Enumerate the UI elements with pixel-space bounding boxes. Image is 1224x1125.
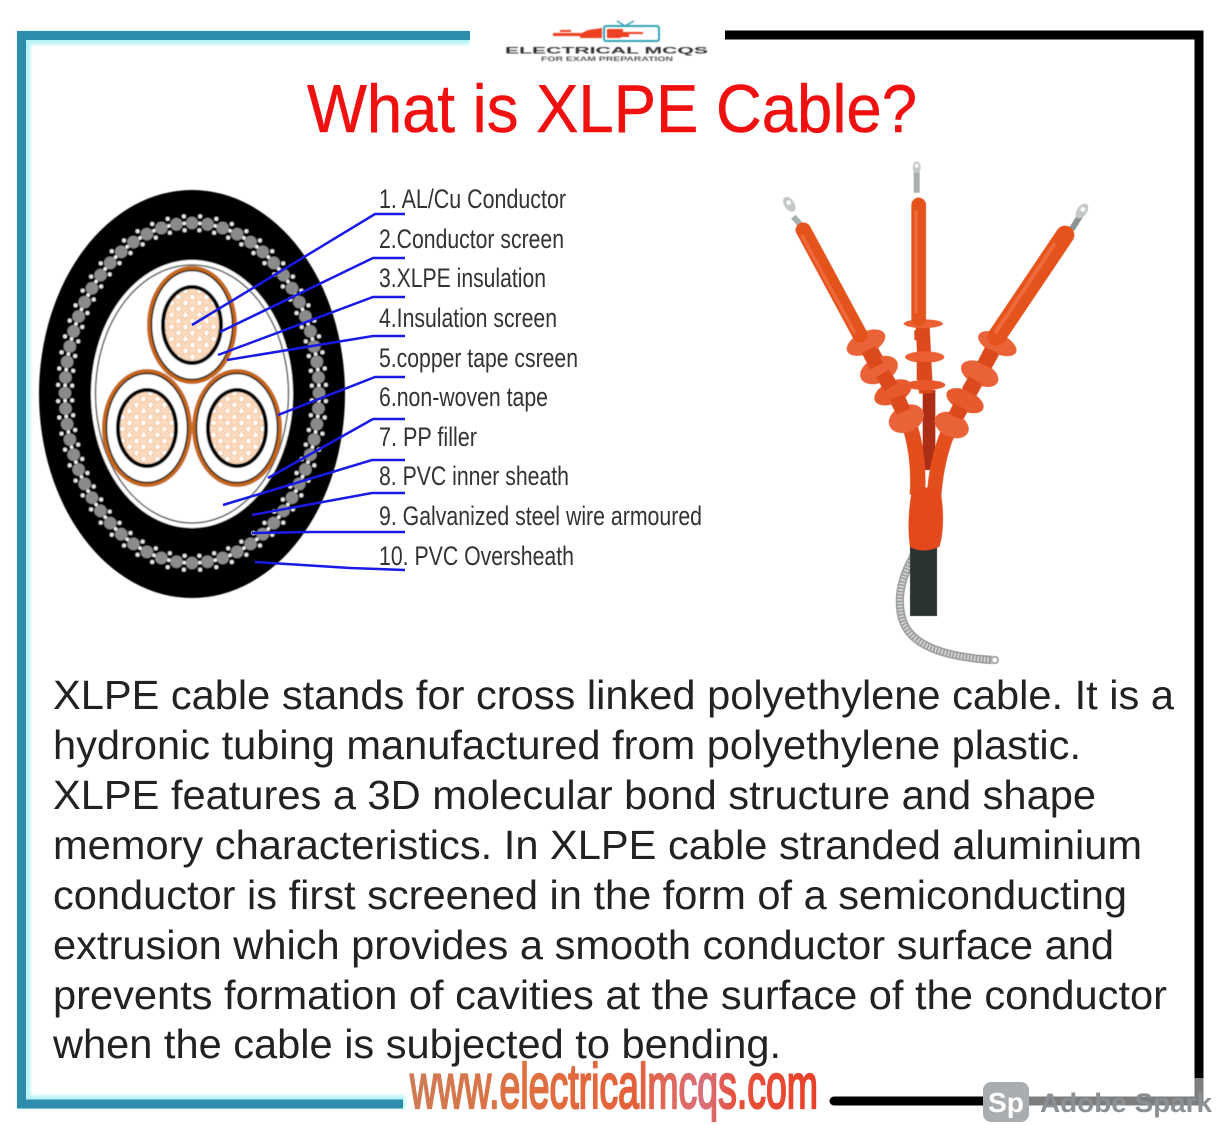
logo: Electrical MCQs: FOR EXAM PREPARATION — [541, 57, 673, 63]
steel wire armour ring — [58, 216, 326, 570]
description paragraph: when the cable is subjected to bending. — [52, 1021, 781, 1067]
lugs — [780, 161, 1091, 229]
description paragraph: XLPE cable stands for cross linked polyethylene cable. It is a — [53, 672, 1174, 718]
diagram: cable cross-section — [39, 190, 345, 598]
description paragraph: XLPE features a 3D molecular bond structure and shape — [53, 772, 1096, 818]
description paragraph: extrusion which provides a smooth conductor surface and — [53, 922, 1114, 968]
watermark: Adobe Spark: Sp — [988, 1087, 1024, 1118]
breakout boot — [908, 487, 943, 550]
icon: television with speed streaks — [553, 21, 659, 41]
component labels: 5.copper tape csreen — [379, 343, 578, 373]
frame: teal left and bottom border — [22, 36, 470, 1104]
component labels: 8. PVC inner sheath — [379, 461, 569, 491]
description paragraph: prevents formation of cavities at the surface of the conductor — [53, 972, 1167, 1018]
description paragraph: hydronic tubing manufactured from polyethylene plastic. — [53, 722, 1081, 768]
component labels: 4.Insulation screen — [379, 303, 557, 333]
inner sheath and filler — [91, 260, 293, 528]
description paragraph — [52, 672, 1174, 1067]
component labels: 2.Conductor screen — [379, 224, 564, 254]
branch: left — [802, 230, 929, 495]
logo: Electrical MCQs — [470, 0, 725, 66]
component labels: 10. PVC Oversheath — [379, 541, 574, 571]
outer PVC oversheath — [39, 190, 345, 598]
component labels — [379, 184, 702, 571]
leader lines — [192, 214, 405, 570]
component labels: 3.XLPE insulation — [379, 263, 546, 293]
component labels: 1. AL/Cu Conductor — [379, 184, 566, 214]
braided earth wire — [900, 555, 998, 663]
description paragraph: conductor is first screened in the form of a semiconducting — [53, 872, 1127, 918]
core: bottom left — [104, 371, 190, 485]
core: bottom right — [194, 371, 280, 485]
branch: centre — [904, 205, 945, 470]
photo: three-core cable termination — [780, 161, 1091, 663]
watermark: Adobe Spark — [983, 1082, 1213, 1122]
component labels: 6.non-woven tape — [379, 382, 548, 412]
branch: right — [930, 235, 1065, 495]
component labels: 9. Galvanized steel wire armoured — [379, 501, 702, 531]
website address: www.electricalmcqs.com — [409, 1052, 818, 1122]
frame: black top and right border — [725, 35, 1199, 1101]
title: What is XLPE Cable? — [307, 71, 917, 147]
logo: Electrical MCQs: ELECTRICAL MCQS — [505, 46, 708, 56]
core: top — [149, 268, 235, 382]
black cable — [910, 545, 937, 616]
component labels: 7. PP filler — [379, 422, 477, 452]
watermark: Adobe Spark: Adobe Spark — [1040, 1088, 1213, 1118]
watermark overlay on frame corner — [983, 1078, 1199, 1101]
description paragraph: memory characteristics. In XLPE cable stranded aluminium — [53, 822, 1142, 868]
